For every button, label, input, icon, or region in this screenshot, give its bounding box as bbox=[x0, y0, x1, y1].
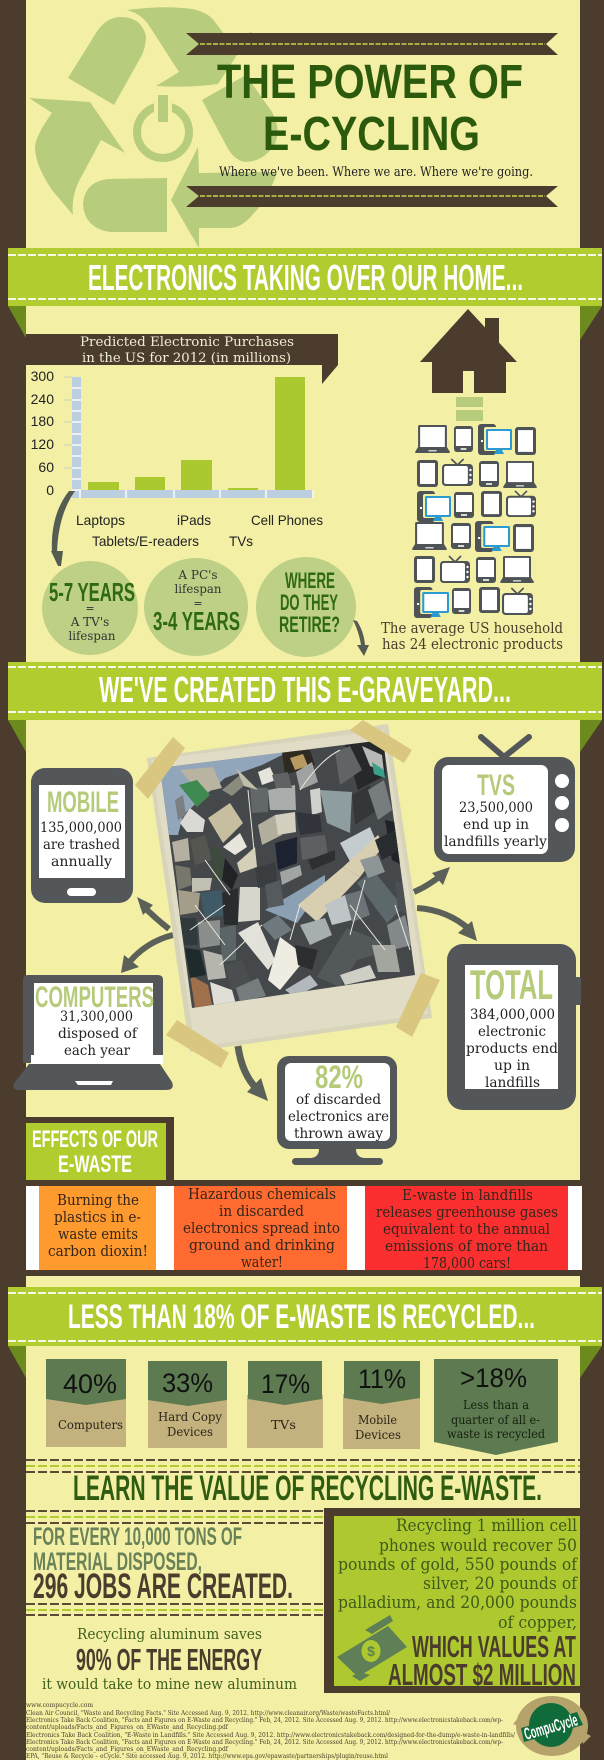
effect: hazardous chemicals: ground and drinking bbox=[189, 1238, 335, 1254]
title: E-CYCLING bbox=[263, 108, 480, 161]
section banner: less than 18 percent recycled bbox=[8, 1287, 602, 1378]
citations: content/uploads/Facts_and_Figures_on_EWaste_and_Recycling.pdf bbox=[26, 1745, 229, 1753]
device: computers stat: COMPUTERS bbox=[35, 981, 154, 1014]
stat card: hard copy devices 33%: Devices bbox=[167, 1425, 213, 1439]
effect: greenhouse gases: E-waste in landfills bbox=[402, 1188, 533, 1204]
section banner: e-graveyard bbox=[8, 662, 602, 752]
heading: effects of our e-waste bbox=[26, 1117, 174, 1180]
icon: house bbox=[420, 309, 517, 393]
jobs statistic bbox=[33, 1523, 293, 1606]
citations: content/uploads/Facts_and_Figures_on_EWaste_and_Recycling.pdf bbox=[26, 1723, 229, 1731]
jobs statistic: MATERIAL DISPOSED, bbox=[33, 1548, 202, 1576]
effect: greenhouse gases: 178,000 cars! bbox=[423, 1256, 511, 1272]
bar chart: predicted electronic purchases: 60 bbox=[38, 459, 54, 475]
title bbox=[217, 56, 523, 161]
device: total stat: TOTAL bbox=[470, 961, 553, 1008]
circle: TV lifespan: lifespan bbox=[68, 629, 116, 643]
icon: recycling symbol with power button bbox=[29, 7, 278, 248]
citations: Electronics Take Back Coalition, "Facts and Figures on E-Waste and Recycling." Feb, 24, 2012. Site Accessed Aug. 9, 2012. http://www.electronicstakeback.com/wp- bbox=[26, 1738, 503, 1746]
panel: cell phone recycling value: pounds of gold, 550 pounds of bbox=[338, 1555, 579, 1574]
stat card: hard copy devices 33%: 33% bbox=[162, 1368, 213, 1398]
effect: burning plastics: plastics in e- bbox=[54, 1210, 141, 1226]
household caption: The average US household bbox=[381, 619, 563, 637]
effect: greenhouse gases: releases greenhouse gases bbox=[376, 1205, 558, 1221]
panel: effects of e-waste bbox=[26, 1186, 582, 1272]
circle: PC lifespan bbox=[144, 558, 248, 656]
device: total stat: electronic bbox=[478, 1024, 546, 1040]
photo: pile of discarded electronics bbox=[147, 724, 432, 1052]
device: 82 percent monitor stat: thrown away bbox=[294, 1126, 383, 1142]
circle: where do they retire: DO THEY bbox=[280, 590, 338, 615]
stat card: more than 18%: Less than a bbox=[463, 1398, 529, 1412]
aluminum statistic: Recycling aluminum saves bbox=[77, 1625, 262, 1643]
chart heading banner: in the US for 2012 (in millions) bbox=[82, 351, 291, 366]
citations: Clean Air Council, "Waste and Recycling Facts." Site Accessed Aug. 9, 2012. http://www.cleanair.org/Waste/wasteFacts.html/ bbox=[26, 1709, 391, 1717]
arrow: retire to graveyard bbox=[353, 620, 369, 656]
stat card: tvs 17%: TVs bbox=[271, 1418, 296, 1432]
device: tv stat bbox=[434, 737, 575, 862]
arrow: chart to lifespan circles bbox=[51, 491, 75, 566]
stat card: more than 18%: >18% bbox=[460, 1363, 527, 1393]
citations: Electronics Take Back Coalition, "E-Waste in Landfills." Site Accessed Aug. 9, 2012. http://www.electronicstakeback.com/designed-for-the-dump/e-waste-in-landfills/ bbox=[26, 1731, 516, 1739]
icon grid: household devices bbox=[412, 424, 537, 618]
effect: hazardous chemicals: in discarded bbox=[219, 1204, 304, 1220]
device: 82 percent monitor stat: 82% bbox=[315, 1059, 363, 1095]
device: mobile stat: 135,000,000 bbox=[40, 820, 122, 836]
circle: where do they retire: RETIRE? bbox=[279, 612, 340, 637]
stat card: tvs 17%: 17% bbox=[261, 1369, 310, 1399]
effect: greenhouse gases bbox=[365, 1186, 568, 1272]
subtitle: Where we've been. Where we are. Where we're going. bbox=[219, 165, 533, 180]
section banner: electronics taking over bbox=[8, 248, 602, 340]
circle: where do they retire bbox=[256, 557, 356, 657]
panel: cell phone recycling value: of copper, bbox=[498, 1613, 577, 1632]
circle: TV lifespan: 5-7 YEARS bbox=[49, 577, 135, 607]
bar chart: predicted electronic purchases: 240 bbox=[31, 391, 54, 407]
title: THE POWER OF bbox=[217, 56, 523, 109]
effect: hazardous chemicals: Hazardous chemicals bbox=[188, 1187, 336, 1203]
effect: greenhouse gases: emissions of more than bbox=[385, 1239, 548, 1255]
tape strips on photo bbox=[135, 720, 440, 1068]
stat card: hard copy devices 33% bbox=[148, 1361, 227, 1448]
lower title ribbon divider bbox=[186, 186, 558, 207]
device: computers stat: disposed of bbox=[58, 1026, 139, 1042]
panel: cell phone recycling value bbox=[324, 1508, 580, 1693]
household caption bbox=[381, 619, 563, 653]
bar chart: predicted electronic purchases: 300 bbox=[31, 368, 54, 384]
bar chart: predicted electronic purchases: Laptops bbox=[76, 512, 125, 528]
stat card: tvs 17% bbox=[247, 1361, 323, 1448]
device: computers stat: each year bbox=[64, 1043, 130, 1059]
device: total stat bbox=[447, 944, 581, 1110]
circle: where do they retire: WHERE bbox=[285, 568, 335, 593]
device: 82 percent monitor stat: electronics are bbox=[288, 1109, 389, 1125]
logo: CompuCycle bbox=[513, 1696, 591, 1756]
device: total stat: 384,000,000 bbox=[470, 1007, 555, 1023]
bar chart: predicted electronic purchases: TVs bbox=[229, 533, 253, 549]
circle: PC lifespan: 3-4 YEARS bbox=[153, 606, 240, 636]
bar chart: predicted electronic purchases: 0 bbox=[46, 482, 54, 498]
device: total stat: products end bbox=[466, 1041, 558, 1057]
icon: equals sign bbox=[456, 397, 483, 421]
citations: Electronics Take Back Coalition, "Facts and Figures on E-Waste and Recycling." Feb, 24, 2012. Site Accessed Aug. 9, 2012. http://www.electronicstakeback.com/wp- bbox=[26, 1716, 503, 1724]
device: 82 percent monitor stat: of discarded bbox=[296, 1092, 381, 1108]
citations: EPA, "Reuse & Recycle – eCycle." Site accessed Aug. 9, 2012. http://www.epa.gov/epawaste/partnerships/plugin/reuse.html bbox=[26, 1752, 388, 1760]
device: computers stat bbox=[13, 975, 173, 1090]
panel: cell phone recycling value: phones would recover 50 bbox=[379, 1536, 577, 1555]
bar chart: predicted electronic purchases: Cell Phones bbox=[251, 512, 323, 528]
chart heading banner: Predicted Electronic Purchases bbox=[80, 335, 294, 350]
effect: hazardous chemicals: electronics spread into bbox=[183, 1221, 340, 1237]
circle: TV lifespan: A TV's bbox=[70, 615, 109, 629]
jobs statistic: FOR EVERY 10,000 TONS OF bbox=[33, 1523, 242, 1551]
jobs statistic: 296 JOBS ARE CREATED. bbox=[33, 1567, 293, 1606]
circle: TV lifespan bbox=[42, 561, 138, 655]
effect: burning plastics bbox=[39, 1186, 156, 1270]
stat card: computers 40%: Computers bbox=[58, 1418, 123, 1432]
top ribbon divider bbox=[186, 33, 558, 55]
circle: PC lifespan: = bbox=[193, 597, 203, 610]
household caption: has 24 electronic products bbox=[382, 635, 563, 653]
device: mobile stat: are trashed bbox=[43, 837, 120, 853]
device: mobile stat: MOBILE bbox=[47, 786, 119, 819]
icon: money bills: $ bbox=[367, 1643, 375, 1659]
bar chart: predicted electronic purchases: Tablets/E-readers bbox=[92, 533, 199, 549]
stat card: computers 40% bbox=[46, 1359, 126, 1447]
bar chart: predicted electronic purchases: 180 bbox=[31, 413, 54, 429]
effect: burning plastics: waste emits bbox=[58, 1227, 138, 1243]
effect: burning plastics: Burning the bbox=[57, 1193, 139, 1209]
bar chart: predicted electronic purchases bbox=[31, 368, 323, 549]
stat card: mobile devices 11% bbox=[343, 1361, 420, 1449]
effect: greenhouse gases: equivalent to the annual bbox=[383, 1222, 550, 1238]
stat card: more than 18%: waste is recycled bbox=[447, 1427, 545, 1441]
stat card: more than 18% bbox=[434, 1359, 558, 1455]
device: mobile stat: annually bbox=[51, 854, 112, 870]
device: tv stat: landfills yearly bbox=[444, 834, 547, 850]
device: total stat: landfills bbox=[485, 1075, 540, 1091]
heading: effects of our e-waste: EFFECTS OF OUR bbox=[32, 1126, 158, 1153]
device: tv stat: end up in bbox=[463, 817, 529, 833]
stat card: computers 40%: 40% bbox=[63, 1369, 117, 1399]
device: 82 percent monitor stat bbox=[277, 1056, 397, 1165]
device: tv stat: 23,500,000 bbox=[459, 800, 533, 816]
citations bbox=[26, 1701, 516, 1760]
heading: effects of our e-waste: E-WASTE bbox=[58, 1151, 132, 1178]
effect: hazardous chemicals bbox=[174, 1186, 347, 1271]
panel: cell phone recycling value: palladium, and 20,000 pounds bbox=[338, 1593, 577, 1612]
chart heading banner bbox=[26, 334, 338, 384]
stat card: mobile devices 11%: 11% bbox=[358, 1364, 406, 1394]
citations: www.compucycle.com bbox=[26, 1701, 94, 1709]
panel: cell phone recycling value: Recycling 1 million cell bbox=[396, 1516, 577, 1535]
arrows from photo bbox=[121, 867, 477, 1101]
device: tv stat: TVS bbox=[477, 769, 515, 802]
effect: burning plastics: carbon dioxin! bbox=[48, 1244, 148, 1260]
circle: TV lifespan: = bbox=[85, 602, 95, 615]
device: computers stat: 31,300,000 bbox=[60, 1009, 133, 1025]
bar chart: predicted electronic purchases: 120 bbox=[31, 436, 54, 452]
bar chart: predicted electronic purchases: iPads bbox=[177, 512, 211, 528]
stat card: mobile devices 11%: Mobile bbox=[358, 1413, 397, 1427]
circle: PC lifespan: A PC's bbox=[177, 568, 218, 582]
stat card: mobile devices 11%: Devices bbox=[355, 1428, 401, 1442]
aluminum statistic: 90% OF THE ENERGY bbox=[76, 1642, 262, 1677]
panel: cell phone recycling value: silver, 20 pounds of bbox=[423, 1574, 579, 1593]
aluminum statistic bbox=[42, 1625, 297, 1693]
circle: PC lifespan: lifespan bbox=[174, 582, 222, 596]
small debris bbox=[172, 762, 412, 1006]
stat card: hard copy devices 33%: Hard Copy bbox=[158, 1410, 222, 1424]
device: total stat: up in bbox=[494, 1058, 530, 1074]
effect: hazardous chemicals: water! bbox=[241, 1255, 283, 1271]
icon: money bills bbox=[337, 1615, 407, 1681]
device: mobile stat bbox=[31, 768, 133, 903]
aluminum statistic: it would take to mine new aluminum bbox=[42, 1675, 297, 1693]
stat card: more than 18%: quarter of all e- bbox=[451, 1413, 540, 1427]
